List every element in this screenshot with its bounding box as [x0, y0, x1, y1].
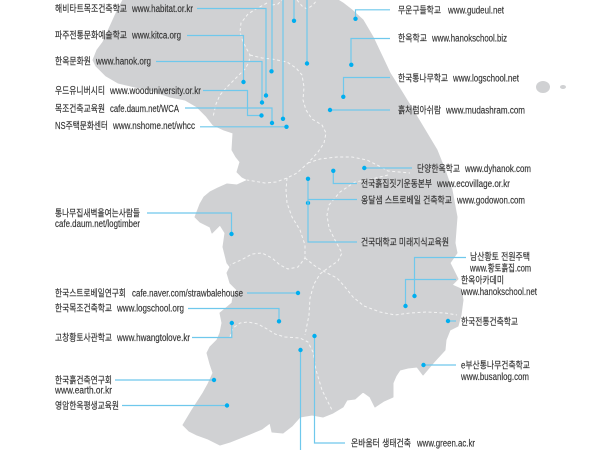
school: 한국목조건축학교: 한국목조건축학교: [55, 302, 112, 314]
school: 흙처럼아쉬람: 흙처럼아쉬람: [398, 104, 441, 116]
school: 해비타트목조건축학교: 해비타트목조건축학교: [55, 2, 127, 15]
school: 통나무집새벽을여는사람들: 통나무집새벽을여는사람들: [55, 206, 140, 220]
connector: top line to dot 272: [269, 0, 274, 74]
school: 흙처럼아쉬람: www.mudashram.com: [445, 106, 525, 116]
school: 파주전통문화예술학교: www.kitca.org: [131, 30, 181, 42]
provincial boundaries: [213, 0, 457, 410]
school: 한옥아카데미: [403, 274, 537, 308]
school: 온바움터 생태건축: 온바움터 생태건축: [351, 438, 411, 450]
school: 남산황토 전원주택: www.황토흙집.com: [469, 262, 531, 274]
school: 옹달샘 스트로베일 건축학교: 옹달샘 스트로베일 건축학교: [361, 194, 452, 206]
school: 옹달샘 스트로베일 건축학교: [306, 194, 525, 206]
school: 단양한옥학교: [362, 163, 531, 175]
school: 한옥아카데미: 한옥아카데미: [461, 274, 504, 286]
school: 남산황토 전원주택: 남산황토 전원주택: [470, 251, 530, 263]
school: 영암한옥평생교육원: [55, 400, 229, 412]
school: e부산통나무건축학교: e부산통나무건축학교: [461, 360, 530, 372]
school: NS주택문화센터: NS주택문화센터: [55, 120, 108, 132]
school: 한옥학교: 한옥학교: [398, 32, 427, 44]
school: 해비타트목조건축학교: [55, 2, 268, 98]
school: 한국통나무학교: [341, 72, 519, 99]
school: 한국통나무학교: www.logschool.net: [452, 74, 519, 84]
school: 온바움터 생태건축: www.green.ac.kr: [416, 438, 476, 450]
school: 한국스트로베일연구회: [55, 288, 300, 300]
connector: top line to dot 294: [292, 0, 296, 23]
school: 무운구들학교: www.gudeul.net: [447, 6, 504, 16]
school: 파주전통문화예술학교: 파주전통문화예술학교: [55, 30, 127, 42]
school: 전국흙집짓기운동본부: [331, 169, 511, 190]
school: 한국흙건축연구회: [54, 374, 216, 396]
school: 통나무집새벽을여는사람들: cafe.daum.net/logtimber: [55, 219, 141, 230]
school: 한국흙건축연구회: www.earth.or.kr: [54, 386, 113, 396]
school: 단양한옥학교: 단양한옥학교: [417, 163, 460, 175]
school: 무운구들학교: [353, 4, 504, 21]
school: 한옥문화원: www.hanok.org: [95, 56, 151, 68]
school: 한국스트로베일연구회: cafe.naver.com/strawbalehouse: [132, 288, 243, 300]
school: 한국목조건축학교: www.logschool.org: [116, 304, 184, 314]
school: 한옥학교: www.hanokschool.biz: [431, 34, 507, 44]
connector: dot to bottom edge: [298, 348, 303, 450]
school: 목조건축교육원: 목조건축교육원: [55, 103, 105, 115]
school: 고창황토사관학교: 고창황토사관학교: [55, 332, 112, 344]
school: 무운구들학교: 무운구들학교: [398, 4, 441, 16]
school: 한옥학교: [349, 32, 507, 67]
school: 한국흙건축연구회: 한국흙건축연구회: [55, 374, 112, 386]
school: 건국대학교 미래지식교육원: 건국대학교 미래지식교육원: [361, 236, 449, 248]
school: 해비타트목조건축학교: www.habitat.or.kr: [131, 4, 194, 15]
connector: top line to dot 283: [281, 0, 285, 121]
school: 파주전통문화예술학교: [55, 30, 246, 84]
school: 한국목조건축학교: [55, 302, 281, 323]
school: 고창황토사관학교: www.hwangtolove.kr: [116, 333, 191, 344]
school: 건국대학교 미래지식교육원: [306, 177, 449, 248]
school: 한국전통건축학교: [446, 316, 518, 328]
school: 남산황토 전원주택: [412, 251, 531, 298]
school: 단양한옥학교: www.dyhanok.com: [464, 164, 531, 175]
school: 한옥아카데미: www.hanokschool.net: [460, 287, 537, 298]
school: 한옥문화원: 한옥문화원: [55, 56, 91, 68]
school: 우드유니버시티: [55, 85, 264, 118]
map of South Korea: [93, 0, 463, 445]
school: 목조건축교육원: [55, 103, 274, 125]
connector: top line to dot 307: [305, 0, 309, 66]
island: Ulleungdo: [536, 81, 550, 93]
school: e부산통나무건축학교: www.busanlog.com: [460, 372, 529, 383]
school: 흙처럼아쉬람: [328, 104, 525, 116]
school: 한국전통건축학교: 한국전통건축학교: [461, 316, 518, 328]
school: 한국통나무학교: 한국통나무학교: [398, 72, 448, 84]
school: 우드유니버시티: 우드유니버시티: [55, 85, 105, 97]
school: e부산통나무건축학교: [421, 360, 530, 383]
school: 한국스트로베일연구회: 한국스트로베일연구회: [55, 288, 126, 300]
school: 전국흙집짓기운동본부: www.ecovillage.or.kr: [436, 179, 511, 190]
school: 목조건축교육원: cafe.daum.net/WCA: [110, 104, 179, 115]
school: 전국흙집짓기운동본부: 전국흙집짓기운동본부: [361, 177, 432, 190]
island: Dokdo: [560, 85, 566, 89]
school: 한옥문화원: [55, 56, 264, 105]
school: NS주택문화센터: [55, 120, 289, 132]
school: 영암한옥평생교육원: 영암한옥평생교육원: [55, 400, 119, 412]
school: 통나무집새벽을여는사람들: [55, 206, 234, 236]
school: 고창황토사관학교: [55, 321, 234, 344]
school: 온바움터 생태건축: [312, 334, 476, 450]
school: 우드유니버시티: www.wooduniversity.or.kr: [109, 86, 202, 97]
school: 옹달샘 스트로베일 건축학교: www.godowon.com: [456, 196, 525, 206]
school: NS주택문화센터: www.nshome.net/whcc: [112, 121, 195, 132]
